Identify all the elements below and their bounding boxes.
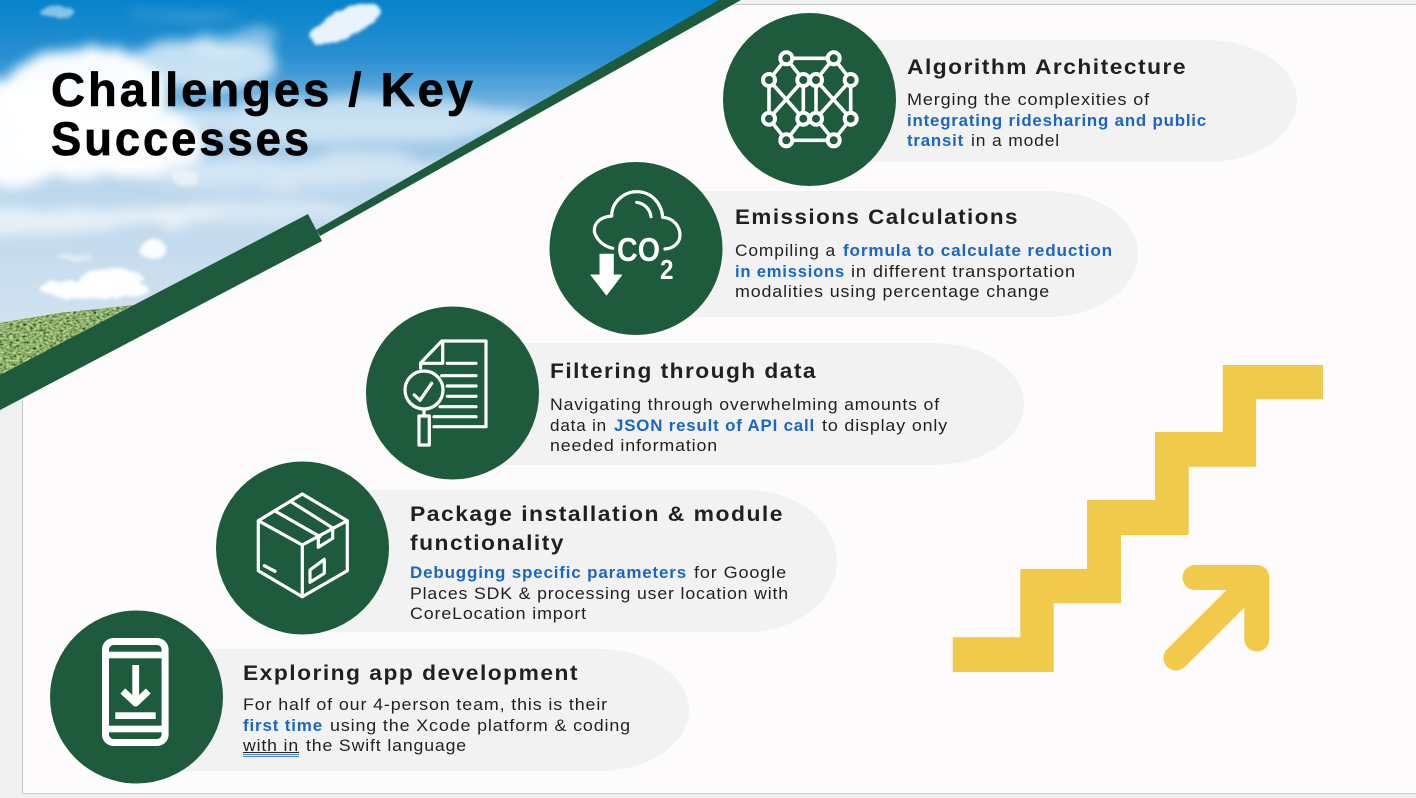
body text: data in <box>550 417 607 435</box>
icon circle <box>550 162 722 335</box>
arrow: yellow upward <box>1176 578 1257 658</box>
body text: Navigating through overwhelming amounts of <box>550 396 940 414</box>
panel: exploring app development <box>50 610 689 784</box>
photo: sky and grass <box>0 0 740 420</box>
body text: to display only <box>822 417 948 435</box>
icon: CO2 cloud: 2 <box>660 254 674 285</box>
heading: Package installation & module <box>410 502 784 526</box>
panel: emissions calculations <box>550 162 1138 335</box>
body text: needed information <box>550 437 718 455</box>
card background <box>440 343 1024 465</box>
icon: CO2 cloud <box>591 192 680 295</box>
body text: for Google <box>694 564 787 582</box>
body text <box>735 242 1113 301</box>
card background <box>780 40 1297 162</box>
panel: algorithm architecture <box>723 13 1297 186</box>
heading: Algorithm Architecture <box>907 55 1187 79</box>
body text <box>410 564 789 623</box>
icon circle <box>216 462 389 634</box>
body text: CoreLocation import <box>410 605 587 623</box>
title: Successes <box>51 112 312 165</box>
body text: JSON result of API call <box>614 417 815 435</box>
card background <box>130 649 689 771</box>
body text: For half of our 4-person team, this is their <box>243 696 608 714</box>
icon circle <box>50 610 223 784</box>
body text: modalities using percentage change <box>735 283 1050 301</box>
panel: filtering through data <box>366 306 1024 480</box>
body text: integrating ridesharing and public <box>907 112 1207 130</box>
icon: document and magnifier <box>405 341 486 445</box>
body text <box>242 696 631 756</box>
body text <box>550 396 948 455</box>
card background <box>300 490 837 632</box>
heading: Filtering through data <box>550 359 817 383</box>
icon circle <box>723 13 896 186</box>
heading <box>410 502 784 555</box>
body text: Places SDK & processing user location with <box>410 585 789 603</box>
title: Challenges / Key <box>51 63 476 116</box>
heading: Emissions Calculations <box>735 205 1019 229</box>
body text: Compiling a <box>735 242 836 260</box>
body text: Debugging specific parameters <box>410 564 687 582</box>
icon circle <box>366 306 539 480</box>
card background <box>600 191 1138 317</box>
body text <box>907 91 1207 150</box>
panel: package installation <box>216 462 837 634</box>
body text: in emissions <box>735 263 845 281</box>
icon: phone download <box>105 642 165 742</box>
heading: Exploring app development <box>243 661 579 685</box>
body text: Merging the complexities of <box>907 91 1150 109</box>
body text: with in <box>242 737 299 755</box>
heading: functionality <box>410 531 565 555</box>
icon: yellow stairs <box>953 365 1323 672</box>
diagonal green band <box>0 0 741 410</box>
icon: CO2 cloud: CO <box>617 231 660 268</box>
icon: package box <box>258 494 347 597</box>
icon: network <box>763 52 857 146</box>
title <box>51 63 476 165</box>
body text: using the Xcode platform & coding <box>330 717 631 735</box>
body text: formula to calculate reduction <box>843 242 1113 260</box>
body text: the Swift language <box>306 737 467 755</box>
body text: in different transportation <box>851 263 1076 281</box>
body text: in a model <box>971 132 1060 150</box>
body text: transit <box>907 132 964 150</box>
body text: first time <box>243 717 323 735</box>
